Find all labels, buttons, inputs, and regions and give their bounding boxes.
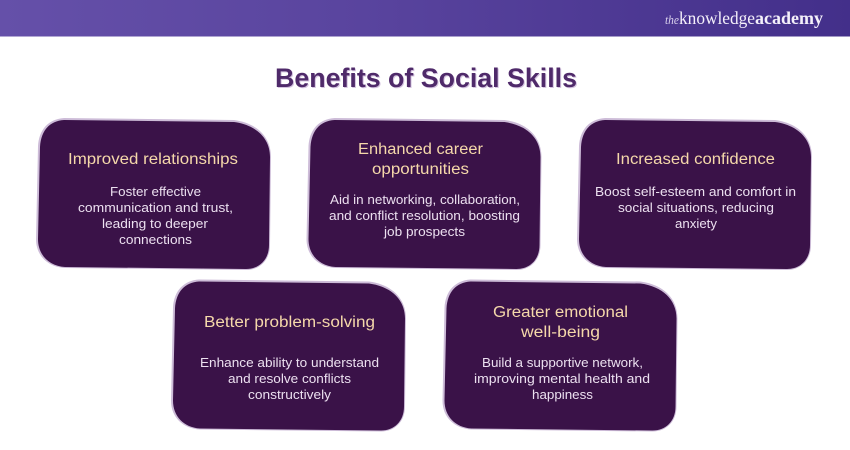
- description: anxiety: [675, 217, 718, 231]
- description: [595, 185, 796, 231]
- heading: Better problem-solving: [204, 314, 375, 331]
- heading: Greater emotional: [493, 304, 628, 321]
- heading: Enhanced career: [358, 141, 483, 158]
- description: job prospects: [383, 225, 465, 239]
- description: communication and trust,: [78, 201, 233, 215]
- panel: improved relationships: [36, 118, 271, 270]
- logo: the knowledge academy: the: [665, 12, 679, 27]
- heading: [493, 304, 628, 341]
- description: Build a supportive network,: [482, 356, 643, 370]
- panel: better problem-solving: [171, 280, 406, 432]
- description: leading to deeper: [102, 217, 208, 231]
- description: improving mental health and: [474, 372, 650, 386]
- description: [329, 193, 520, 239]
- description: [200, 356, 379, 402]
- heading: opportunities: [372, 161, 469, 178]
- description: Boost self-esteem and comfort in: [595, 185, 796, 199]
- description: connections: [119, 233, 192, 247]
- heading: well-being: [520, 324, 600, 341]
- heading: Improved relationships: [68, 151, 238, 168]
- panel: increased confidence: [577, 118, 812, 270]
- header banner: [0, 0, 850, 36]
- title: Benefits of Social Skills: [275, 63, 577, 93]
- description: social situations, reducing: [618, 201, 774, 215]
- description: [78, 185, 233, 247]
- description: Foster effective: [110, 185, 201, 199]
- panel: greater emotional well-being: [442, 280, 678, 432]
- heading: [358, 141, 483, 178]
- description: and resolve conflicts: [228, 372, 351, 386]
- heading: Increased confidence: [616, 151, 775, 168]
- description: happiness: [532, 388, 593, 402]
- panel: enhanced career opportunities: [306, 118, 542, 270]
- description: [474, 356, 650, 402]
- logo: the knowledge academy: academy: [755, 8, 823, 28]
- description: and conflict resolution, boosting: [329, 209, 520, 223]
- description: Aid in networking, collaboration,: [330, 193, 520, 207]
- title: Benefits of Social Skills: [276, 64, 578, 94]
- logo: the knowledge academy: knowledge: [679, 8, 755, 28]
- description: Enhance ability to understand: [200, 356, 379, 370]
- description: constructively: [248, 388, 332, 402]
